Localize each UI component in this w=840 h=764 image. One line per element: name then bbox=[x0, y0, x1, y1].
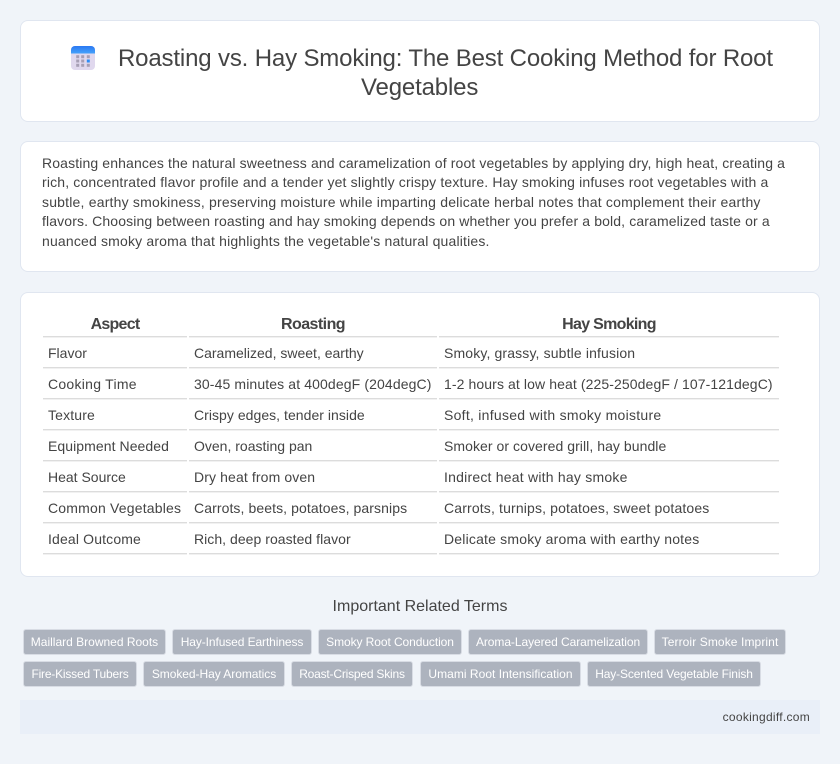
comparison table: Flavor bbox=[48, 345, 87, 361]
comparison table: 30-45 minutes at 400degF (204degC) bbox=[194, 376, 432, 392]
comparison table: Common Vegetables bbox=[48, 500, 181, 516]
comparison table: Carrots, beets, potatoes, parsnips bbox=[194, 500, 407, 516]
text block: summary: subtle, earthy smokiness, preserving moisture while imparting delicate herbal notes that complement their earthy bbox=[42, 194, 761, 210]
panel: summary text card bbox=[20, 141, 820, 272]
comparison table: Roasting bbox=[281, 316, 345, 333]
comparison table: Cooking Time bbox=[48, 376, 137, 392]
comparison table: Oven, roasting pan bbox=[194, 438, 312, 454]
title: Roasting vs. Hay Smoking: The Best Cooking Method for Root bbox=[118, 45, 773, 72]
text block: summary bbox=[42, 155, 785, 249]
related term tags: Hay-Infused Earthiness bbox=[181, 635, 303, 649]
comparison table: Heat Source bbox=[48, 469, 126, 485]
comparison table: Smoky, grassy, subtle infusion bbox=[444, 345, 635, 361]
text block: summary: rich, concentrated flavor profile and a tender yet slightly crispy texture. Hay smoking infuses root vegetables with a bbox=[42, 174, 768, 190]
comparison table: 1-2 hours at low heat (225-250degF / 107-121degC) bbox=[444, 376, 773, 392]
text block: summary: Roasting enhances the natural sweetness and caramelization of root vegetables by applying dry, high heat, creating a bbox=[42, 155, 785, 171]
comparison table bbox=[43, 316, 779, 555]
comparison table: Rich, deep roasted flavor bbox=[194, 531, 351, 547]
comparison table: Crispy edges, tender inside bbox=[194, 407, 365, 423]
comparison table: Dry heat from oven bbox=[194, 469, 315, 485]
comparison table: Delicate smoky aroma with earthy notes bbox=[444, 531, 699, 547]
related term tags: Fire-Kissed Tubers bbox=[31, 667, 129, 681]
comparison table: Caramelized, sweet, earthy bbox=[194, 345, 364, 361]
title: Vegetables bbox=[361, 74, 478, 101]
related term tags: Smoky Root Conduction bbox=[326, 635, 454, 649]
title bbox=[118, 45, 773, 101]
related term tags: Roast-Crisped Skins bbox=[299, 667, 405, 681]
icon: calendar bbox=[71, 46, 95, 70]
related term tags bbox=[23, 629, 786, 687]
comparison table: Equipment Needed bbox=[48, 438, 169, 454]
panel: comparison table card bbox=[20, 292, 820, 577]
comparison table: Texture bbox=[48, 407, 95, 423]
comparison table: Ideal Outcome bbox=[48, 531, 141, 547]
text block: summary: nuanced smoky aroma that highlights the vegetable's natural qualities. bbox=[42, 233, 490, 249]
comparison table: Smoker or covered grill, hay bundle bbox=[444, 438, 666, 454]
comparison table: Aspect bbox=[91, 316, 139, 333]
comparison table: Carrots, turnips, potatoes, sweet potatoes bbox=[444, 500, 709, 516]
related term tags: Aroma-Layered Caramelization bbox=[476, 635, 640, 649]
comparison table: Hay Smoking bbox=[562, 316, 656, 333]
related term tags: Terroir Smoke Imprint bbox=[662, 635, 778, 649]
footer bar bbox=[20, 700, 820, 734]
footer source: cookingdiff.com bbox=[723, 710, 810, 724]
text block: summary: flavors. Choosing between roasting and hay smoking depends on whether you prefer a bold, caramelized taste or a bbox=[42, 213, 770, 229]
heading: related terms: Important Related Terms bbox=[333, 598, 507, 615]
panel: header card bbox=[20, 20, 820, 122]
related term tags: Smoked-Hay Aromatics bbox=[152, 667, 276, 681]
related term tags: Umami Root Intensification bbox=[428, 667, 573, 681]
comparison table: Soft, infused with smoky moisture bbox=[444, 407, 661, 423]
related term tags: Maillard Browned Roots bbox=[31, 635, 158, 649]
comparison table: Indirect heat with hay smoke bbox=[444, 469, 628, 485]
related term tags: Hay-Scented Vegetable Finish bbox=[595, 667, 753, 681]
